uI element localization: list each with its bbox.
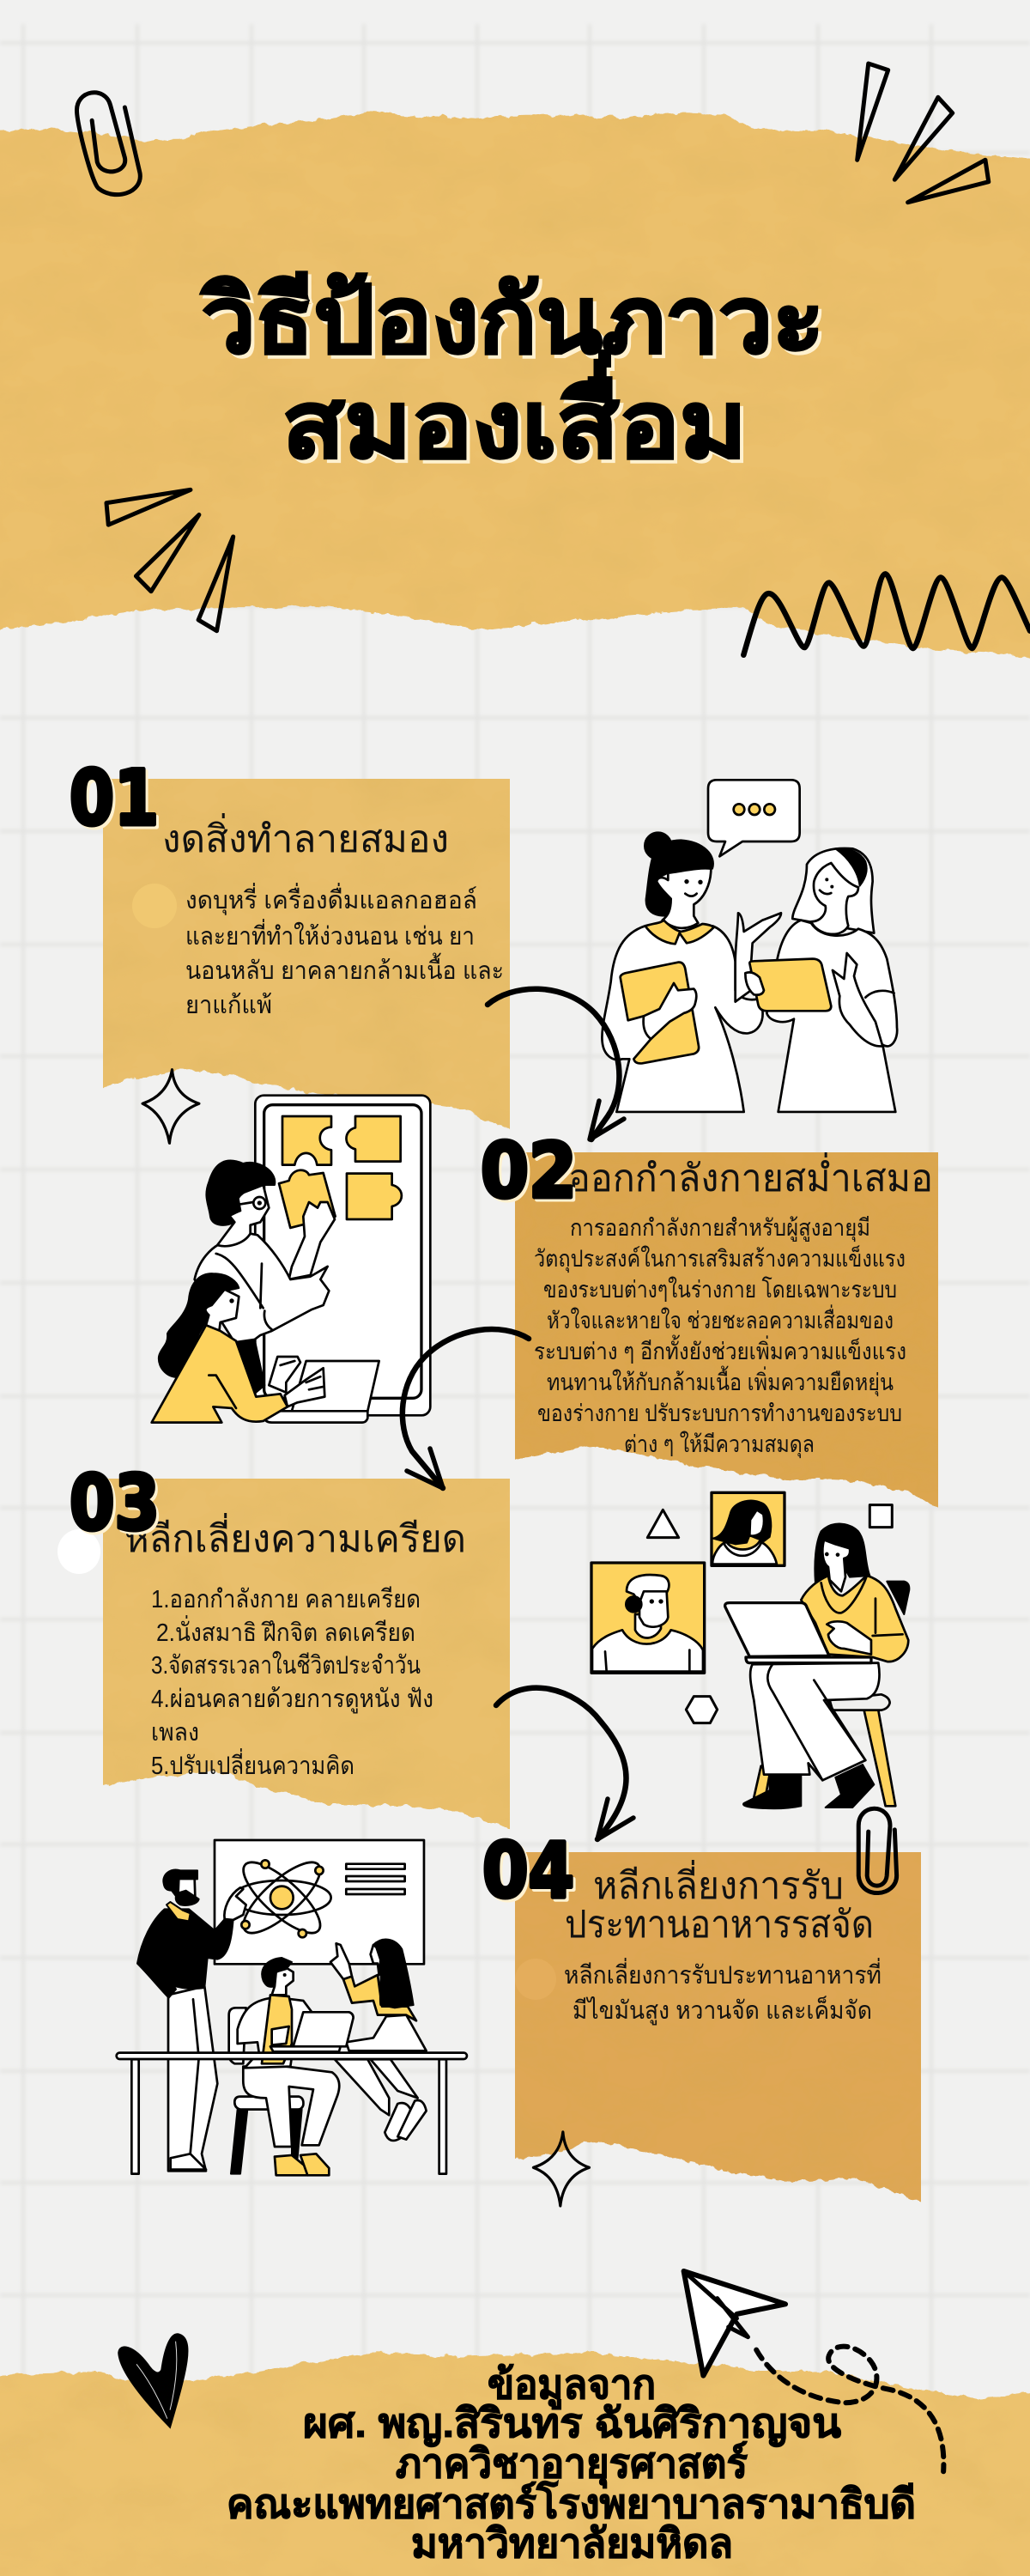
step 1 text: งดบุหรี่ เครื่องดื่มแอลกอฮอล์ <box>185 883 477 915</box>
step 3 text <box>58 1512 466 1780</box>
number 03: 03 <box>70 1459 160 1547</box>
arrow: step 1 to step 2 <box>488 989 624 1139</box>
footer credit text <box>227 2361 916 2566</box>
laptop <box>264 1361 379 1423</box>
illustration: team at whiteboard and table <box>117 1840 467 2175</box>
man with glasses <box>195 1161 335 1393</box>
title: วิธีป้องกันภาวะ <box>201 268 824 372</box>
icon: heart scribble <box>118 2334 187 2427</box>
step 1 text <box>132 812 504 1019</box>
icon: paper plane <box>684 2271 785 2376</box>
icon: zigzag scribble <box>743 574 1030 655</box>
standing man <box>137 1870 246 2171</box>
seated man with chair <box>229 1958 339 2175</box>
number 02: 02 <box>481 1127 577 1215</box>
step 2 text <box>534 1151 933 1459</box>
icon: burst triangles left <box>106 489 233 631</box>
panel: step 3 paper <box>94 1470 518 1832</box>
footer credit text: ผศ. พญ.สิรินทร ฉันศิริกาญจน <box>303 2400 841 2447</box>
illustration: puzzle board team <box>152 1096 430 1423</box>
step 3 text: 3.จัดสรรเวลาในชีวิตประจำวัน <box>151 1650 421 1680</box>
panel: step 4 paper <box>506 1844 930 2207</box>
woman with bun <box>602 832 781 1112</box>
title <box>201 268 824 477</box>
step 4 text: หลีกเลี่ยงการรับ <box>593 1859 844 1907</box>
video tile: man with headset <box>591 1563 705 1673</box>
number 04: 04 <box>482 1826 574 1915</box>
step 1 text: และยาที่ทำให้ง่วงนอน เช่น ยา <box>185 919 475 951</box>
step 2 text: การออกกำลังกายสำหรับผู้สูงอายุมี <box>570 1215 870 1242</box>
step 1 text: นอนหลับ ยาคลายกล้ามเนื้อ และ <box>185 952 504 985</box>
step 2 text: ออกกำลังกายสม่ำเสมอ <box>568 1151 933 1200</box>
step 2 text: หัวใจและหายใจ ช่วยชะลอความเสื่อมของ <box>547 1304 894 1334</box>
illustration: woman on video call <box>591 1492 909 1808</box>
step 2 text: วัตถุประสงค์ในการเสริมสร้างความแข็งแรง <box>534 1243 906 1273</box>
panel: step 2 paper <box>506 1144 947 1511</box>
woman with long hair <box>745 848 897 1112</box>
panel: step 1 paper <box>94 770 518 1133</box>
step 3 text: 2.นั่งสมาธิ ฝึกจิต ลดเครียด <box>156 1615 415 1647</box>
puzzle pieces <box>279 1116 402 1228</box>
icon: paperclip top left <box>76 93 140 195</box>
step 4 text: หลีกเลี่ยงการรับประทานอาหารที่ <box>564 1958 882 1990</box>
icon: sparkle lower <box>533 2132 589 2206</box>
step 4 text <box>515 1859 882 2026</box>
step 2 text: ของร่างกาย ปรับระบบการทำงานของระบบ <box>537 1400 902 1426</box>
step 3 text: 4.ผ่อนคลายด้วยการดูหนัง ฟัง <box>151 1686 433 1714</box>
panel: top torn paper band <box>0 112 1030 659</box>
step 2 text: ระบบต่าง ๆ อีกทั้งยังช่วยเพิ่มความแข็งแรง <box>534 1334 906 1364</box>
step 3 text: หลีกเลี่ยงความเครียด <box>124 1512 466 1560</box>
step 1 text: งดสิ่งทำลายสมอง <box>162 812 449 860</box>
chair <box>754 1582 909 1806</box>
step 4 text: มีไขมันสูง หวานจัด และเค็มจัด <box>573 1995 872 2026</box>
arrow: step 3 to step 4 <box>496 1688 633 1839</box>
footer credit text: ภาควิชาอายุรศาสตร์ <box>396 2440 748 2488</box>
step 2 text: ของระบบต่างๆในร่างกาย โดยเฉพาะระบบ <box>543 1276 897 1303</box>
step 1 text: ยาแก้แพ้ <box>185 992 272 1019</box>
step 4 text: ประทานอาหารรสจัด <box>565 1904 874 1946</box>
video tile: woman <box>712 1492 785 1565</box>
step 3 text: 1.ออกกำลังกาย คลายเครียด <box>151 1586 421 1613</box>
table and laptop <box>117 2012 467 2174</box>
footer credit text: มหาวิทยาลัยมหิดล <box>411 2520 733 2566</box>
seated woman with laptop <box>725 1524 908 1808</box>
board <box>255 1096 430 1415</box>
illustration: two women talking <box>602 780 897 1112</box>
footer credit text: คณะแพทยศาสตร์โรงพยาบาลรามาธิบดี <box>227 2480 916 2526</box>
icon: dashed flight path <box>756 2347 943 2471</box>
arrow: step 2 to step 3 <box>403 1329 529 1488</box>
step 2 text: ทนทานให้กับกล้ามเนื้อ เพิ่มความยืดหยุ่น <box>547 1365 894 1397</box>
step 3 text: เพลง <box>151 1719 199 1747</box>
icon: sparkle <box>142 1070 199 1143</box>
whiteboard with atom <box>215 1840 424 1964</box>
speech bubble <box>708 780 800 856</box>
icon: paperclip on step 4 <box>858 1808 897 1893</box>
pointing woman <box>330 1940 427 2141</box>
title: สมองเสื่อม <box>282 360 747 477</box>
number 01: 01 <box>70 754 159 842</box>
panel: bottom torn paper band <box>0 2353 1030 2576</box>
triangle, square and hexagon shapes <box>647 1505 892 1723</box>
step 3 text: 5.ปรับเปลี่ยนความคิด <box>151 1748 354 1780</box>
footer credit text: ข้อมูลจาก <box>488 2361 656 2410</box>
woman typing <box>152 1273 324 1423</box>
step 2 text: ต่าง ๆ ให้มีความสมดุล <box>624 1431 815 1459</box>
icon: burst triangles top right <box>857 64 989 203</box>
